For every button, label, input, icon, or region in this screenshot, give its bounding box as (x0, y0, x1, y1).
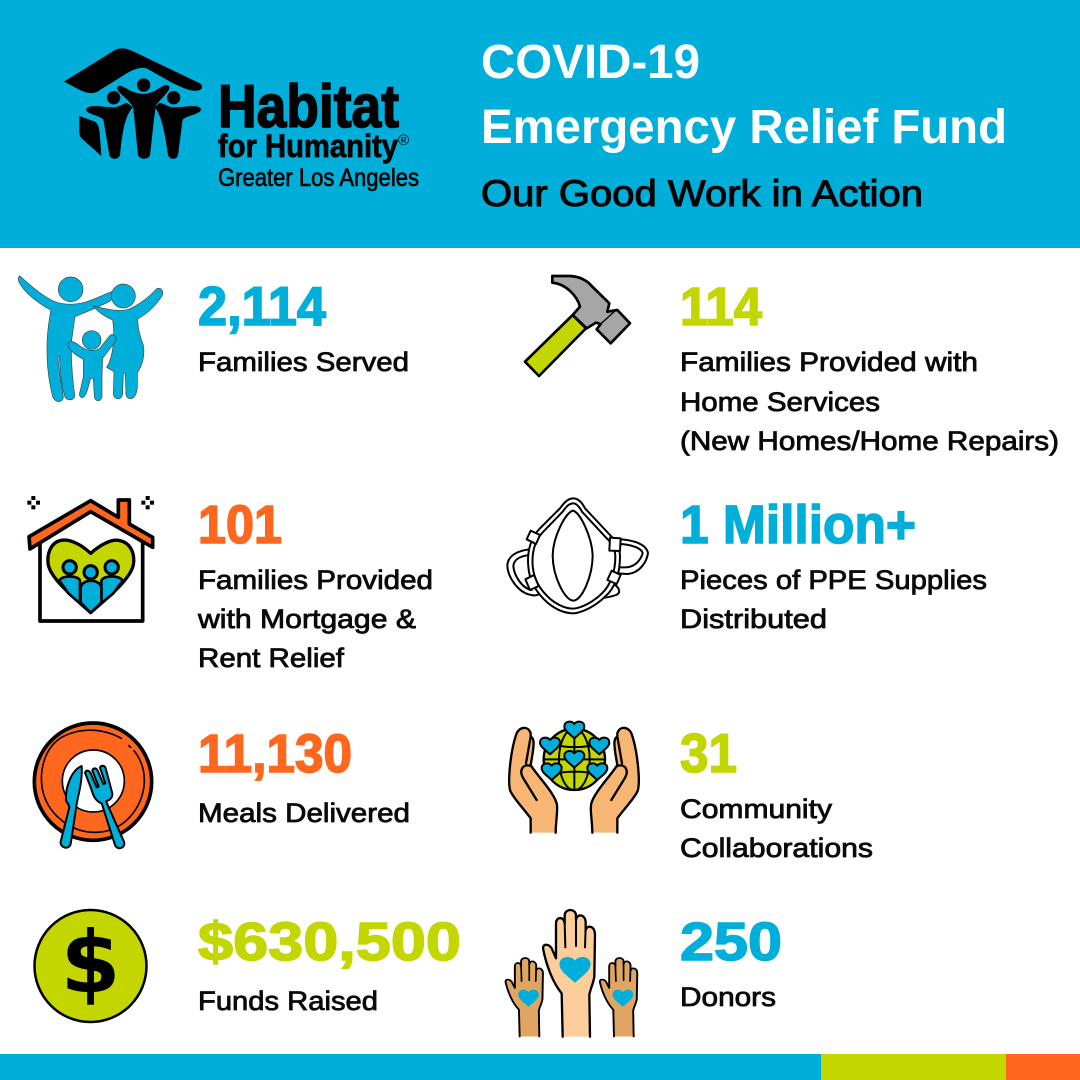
number: 11,130 (198, 724, 352, 784)
logo wordmark: Habitat: Habitat (218, 73, 399, 140)
stat: PPE supplies (507, 495, 987, 634)
number: 2,114 (198, 276, 326, 337)
icon: hammer (525, 276, 630, 376)
title: COVID-19: COVID-19 (481, 36, 700, 89)
stat: meals delivered (34, 723, 410, 848)
label: Funds Raised (198, 986, 378, 1016)
label (680, 347, 1059, 456)
label (680, 565, 987, 634)
label: Families Provided with (680, 347, 978, 377)
title: Emergency Relief Fund: Emergency Relief Fund (481, 101, 1007, 154)
label: with Mortgage & (197, 604, 416, 634)
logo wordmark: Greater Los Angeles: Greater Los Angeles (218, 164, 419, 192)
icon: house with heart and family (27, 496, 154, 621)
number: 250 (680, 912, 782, 972)
number: $630,500 (198, 912, 461, 972)
logo registered mark: ® (398, 132, 409, 149)
icon: dollar coin (34, 910, 146, 1022)
number: 31 (680, 723, 737, 784)
stat: families served (18, 276, 409, 402)
icon: face mask (507, 498, 648, 613)
stat: mortgage and rent relief (27, 495, 433, 673)
label: Community (680, 794, 833, 824)
stat: funds raised (34, 910, 461, 1022)
icon: hands holding globe with hearts (509, 722, 639, 833)
label: Families Served (198, 347, 409, 377)
label: Donors (680, 982, 776, 1012)
label: Families Provided (198, 565, 433, 595)
center hand (543, 910, 595, 1037)
label: Pieces of PPE Supplies (680, 565, 987, 595)
number: 101 (198, 495, 282, 555)
label (197, 565, 433, 673)
icon: family (18, 276, 163, 402)
subtitle: Our Good Work in Action (481, 173, 923, 214)
icon: plate with knife and fork (34, 723, 152, 848)
header banner (0, 0, 1080, 248)
label (680, 794, 873, 863)
stat: home services (525, 276, 1059, 456)
label: Collaborations (680, 833, 873, 863)
label: Distributed (680, 604, 827, 634)
label: Meals Delivered (198, 798, 410, 828)
logo: Habitat for Humanity Greater Los Angeles (64, 48, 419, 192)
logo wordmark: for Humanity: for Humanity (218, 128, 398, 164)
label: Rent Relief (198, 643, 345, 673)
logo mark: roof and three figures (64, 48, 202, 159)
left hand (506, 958, 543, 1037)
label: Home Services (680, 387, 880, 417)
right hand (600, 958, 637, 1037)
stat: donors (506, 910, 782, 1037)
number: 114 (680, 277, 762, 337)
number: 1 Million+ (680, 495, 916, 555)
stat: community collaborations (509, 722, 873, 863)
label: (New Homes/Home Repairs) (680, 426, 1059, 456)
icon: raised hands with hearts (506, 910, 637, 1037)
footer colour bar (0, 1054, 1080, 1080)
icon: dollar coin: $ (61, 913, 120, 1013)
